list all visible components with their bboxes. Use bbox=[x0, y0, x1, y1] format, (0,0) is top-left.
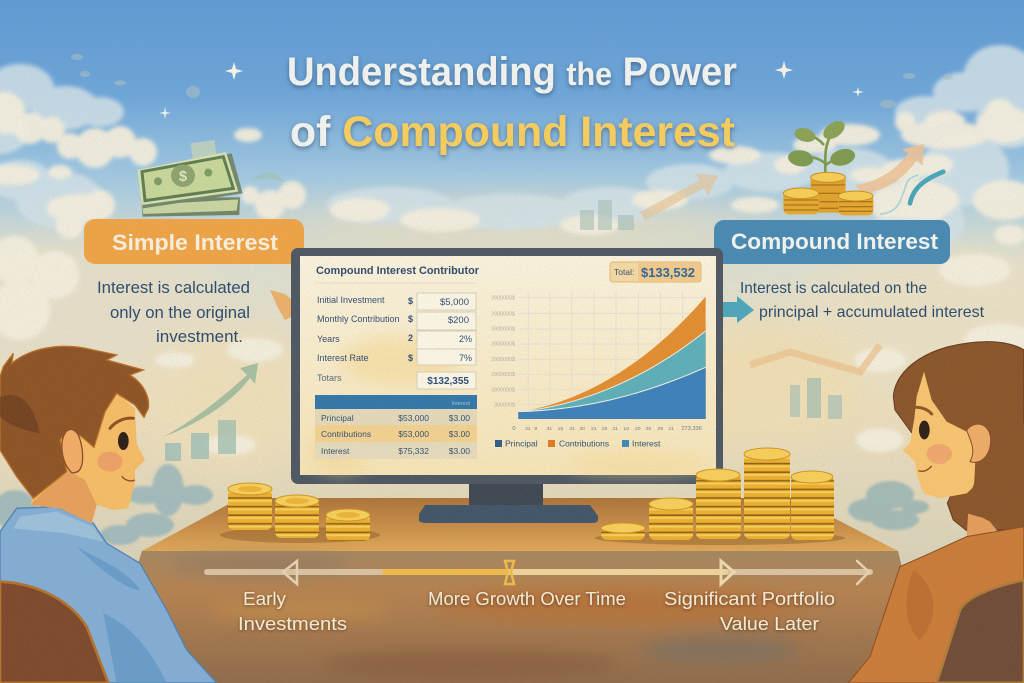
title: of Compound Interest bbox=[290, 108, 735, 156]
monitor stand bbox=[419, 482, 598, 523]
input form: 7% bbox=[459, 353, 472, 363]
shirt bbox=[0, 507, 217, 683]
ear bbox=[62, 429, 83, 473]
text: simple interest description: investment. bbox=[156, 327, 243, 346]
input form: 2 bbox=[408, 333, 413, 343]
faint background chart right bbox=[750, 345, 880, 419]
pale blue cloud bodies bbox=[0, 45, 1024, 254]
faint foliage right bbox=[848, 481, 929, 530]
panel: compound interest heading: Compound Interest bbox=[731, 229, 939, 254]
chart legend bbox=[495, 438, 661, 448]
results table: $75,332 bbox=[398, 446, 429, 456]
area chart: 3900000$ bbox=[491, 311, 515, 317]
sweater bbox=[848, 527, 1024, 683]
area chart: 9 bbox=[534, 426, 537, 432]
neck bbox=[967, 510, 997, 538]
smile bbox=[918, 466, 932, 471]
total badge: Total: bbox=[614, 267, 634, 277]
decorative sparkles bbox=[159, 61, 864, 119]
area chart: 20 bbox=[635, 426, 641, 432]
hair bbox=[0, 346, 149, 498]
area chart: 3900000$ bbox=[491, 296, 515, 302]
icon: stack of banknotes: $ bbox=[179, 169, 187, 185]
results table: $3.00 bbox=[449, 413, 470, 423]
icon: stack of banknotes bbox=[137, 140, 243, 217]
timeline labels: More Growth Over Time bbox=[428, 588, 626, 609]
chart legend: Principal bbox=[505, 438, 538, 448]
small faded stars bbox=[71, 54, 953, 108]
input form: Years bbox=[317, 334, 340, 344]
results table: $53,000 bbox=[398, 429, 429, 439]
coin stacks bbox=[811, 175, 846, 213]
title: Understanding the Power bbox=[287, 50, 737, 94]
text: simple interest description: only on the original bbox=[110, 303, 250, 322]
arrow: simple interest to monitor bbox=[270, 290, 305, 320]
teal squiggle bbox=[910, 172, 943, 203]
timeline labels: Value Later bbox=[720, 613, 819, 634]
panel: compound interest heading bbox=[714, 220, 950, 264]
text: simple interest description: Interest is calculated bbox=[97, 278, 250, 297]
total badge bbox=[610, 262, 701, 282]
stem and leaves bbox=[800, 133, 847, 173]
area chart: 31 bbox=[569, 426, 575, 432]
faint background chart left bbox=[163, 363, 258, 461]
area chart: 0 bbox=[512, 426, 515, 432]
results table: Interest bbox=[321, 446, 350, 456]
input form: $ bbox=[408, 296, 413, 306]
input form: $200 bbox=[448, 315, 469, 326]
text: simple interest description bbox=[97, 278, 250, 346]
area chart: 21 bbox=[591, 426, 597, 432]
face bbox=[903, 372, 977, 498]
results table: Principal bbox=[321, 413, 354, 423]
input form: $5,000 bbox=[440, 297, 469, 308]
input form: $ bbox=[408, 353, 413, 363]
title bbox=[287, 50, 737, 156]
faint foliage left bbox=[0, 464, 213, 545]
area chart: 21 bbox=[668, 426, 674, 432]
principal blue area bbox=[518, 367, 706, 419]
hair back bbox=[893, 342, 1024, 531]
area chart: 3900000$ bbox=[491, 387, 515, 393]
panel: simple interest heading bbox=[84, 219, 304, 264]
neck and face bbox=[30, 393, 145, 523]
growth arrow bbox=[855, 144, 924, 193]
area chart: 26 bbox=[646, 426, 651, 432]
area chart: 273,336 bbox=[681, 426, 702, 432]
total badge: $133,532 bbox=[641, 266, 695, 280]
background clouds bbox=[0, 45, 1024, 470]
table and ground bbox=[100, 498, 930, 683]
chart legend: Interest bbox=[632, 438, 661, 448]
input form bbox=[315, 283, 476, 389]
area chart: 40 bbox=[579, 426, 585, 432]
input form: Totars bbox=[317, 373, 342, 383]
area chart: 31 bbox=[547, 426, 552, 432]
eye and brow bbox=[118, 432, 129, 450]
character: girl bbox=[848, 342, 1024, 683]
interest teal area bbox=[518, 331, 706, 419]
monitor bbox=[291, 248, 723, 523]
area chart bbox=[491, 292, 706, 432]
timeline labels: Early bbox=[243, 588, 287, 609]
results table: Interest bbox=[452, 401, 470, 407]
area chart: 19 bbox=[602, 426, 607, 432]
input form: 2% bbox=[459, 334, 472, 344]
coin stacks left bbox=[220, 483, 380, 543]
timeline arrow bbox=[207, 561, 870, 584]
icon: plant on coins bbox=[783, 117, 943, 215]
smile bbox=[122, 476, 135, 481]
text: compound interest description: principal + accumulated interest bbox=[759, 304, 985, 321]
input form: Interest Rate bbox=[317, 353, 369, 363]
text: compound interest description bbox=[740, 280, 985, 321]
chair bbox=[0, 582, 108, 683]
cheek bbox=[97, 452, 123, 472]
faint background arrows top bbox=[252, 173, 718, 230]
results table: $53,000 bbox=[398, 413, 429, 423]
text: compound interest description: Interest is calculated on the bbox=[740, 280, 927, 297]
timeline labels: Significant Portfolio bbox=[664, 588, 835, 609]
results table: Contributions bbox=[321, 429, 371, 439]
arrow: compound interest to monitor bbox=[723, 296, 754, 323]
calculator title: Compound Interest Contributor bbox=[316, 265, 480, 277]
area chart: 31 bbox=[525, 426, 531, 432]
timeline labels bbox=[238, 588, 835, 634]
ear bbox=[967, 424, 991, 462]
area chart: 3900000$ bbox=[491, 327, 515, 333]
contributions area bbox=[518, 297, 706, 419]
results table: $3.00 bbox=[449, 429, 470, 439]
area chart: 25 bbox=[658, 426, 663, 432]
input form: Monthly Contribution bbox=[317, 314, 400, 324]
chair bbox=[937, 580, 1024, 683]
results table bbox=[315, 395, 477, 459]
area chart: 3900000$ bbox=[491, 357, 515, 363]
hair lock below face bbox=[957, 423, 1024, 525]
area chart: 18 bbox=[623, 426, 629, 432]
screen warm patches bbox=[310, 336, 710, 475]
input form: $ bbox=[408, 314, 413, 324]
cheek bbox=[927, 444, 952, 464]
area chart: 2900000$ bbox=[491, 372, 515, 378]
area chart: 31 bbox=[612, 426, 618, 432]
coin stacks right bbox=[595, 448, 845, 545]
panel: simple interest heading: Simple Interest bbox=[112, 230, 279, 255]
chart legend: Contributions bbox=[559, 438, 609, 448]
character: boy bbox=[0, 346, 217, 683]
area chart: 19 bbox=[558, 426, 563, 432]
area chart: 300000$ bbox=[494, 402, 515, 408]
timeline labels: Investments bbox=[238, 613, 347, 634]
results table: $3.00 bbox=[449, 446, 470, 456]
input form: Initial Investment bbox=[317, 295, 385, 305]
area chart: 3900000$ bbox=[491, 342, 515, 348]
input form: $132,355 bbox=[427, 376, 469, 387]
monitor frame bbox=[291, 248, 723, 484]
cream cloud puffs bbox=[0, 92, 1024, 455]
monitor screen bbox=[300, 256, 716, 475]
eye and brow bbox=[919, 421, 930, 439]
